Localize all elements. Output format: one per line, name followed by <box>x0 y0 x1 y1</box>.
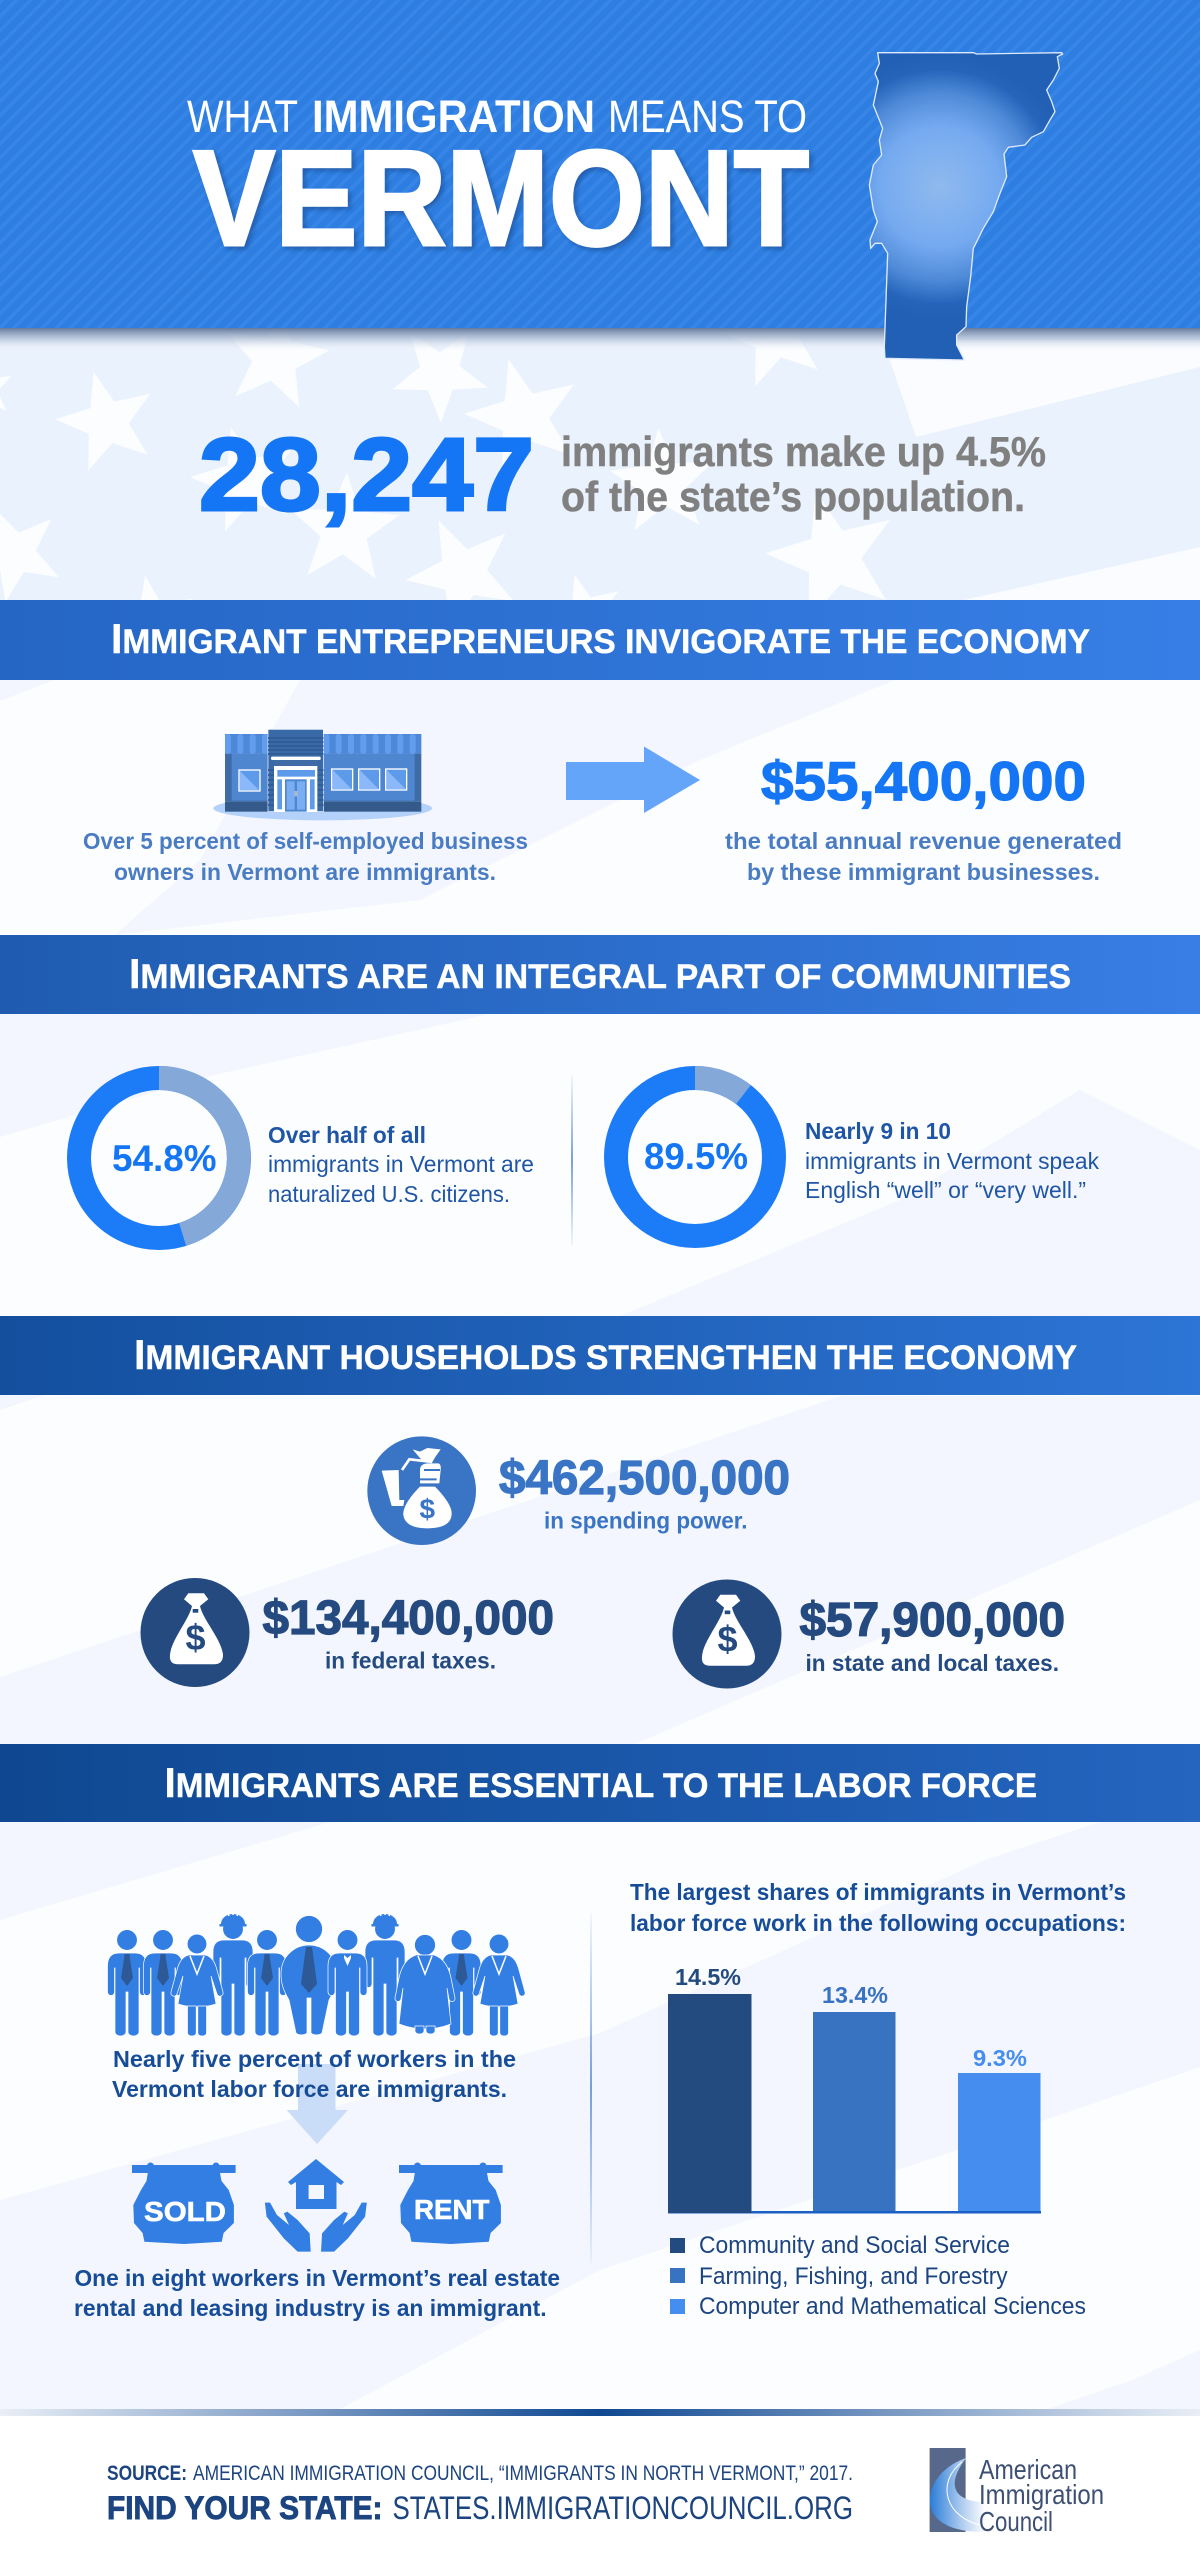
bar chart: occupations: 13.4% <box>822 1982 888 2008</box>
footer: source <box>107 2462 853 2526</box>
legend <box>670 2232 1086 2320</box>
text: occupations heading <box>630 1879 1126 1936</box>
banner: households <box>0 1316 1200 1395</box>
text: naturalized citizens <box>268 1122 534 1207</box>
statistic: spending power: $462,500,000 <box>499 1452 790 1505</box>
icon: rent sign <box>399 2162 503 2244</box>
statistic: spending power <box>499 1452 790 1534</box>
icon: money bag, federal taxes <box>140 1578 250 1687</box>
bar chart: occupations: 9.3% <box>973 2045 1027 2071</box>
icon: money bag, state and local taxes <box>672 1580 782 1688</box>
title: VERMONT <box>193 122 809 274</box>
text: self-employed owners <box>83 828 528 885</box>
panel: households <box>140 1436 1065 1688</box>
logo: American Immigration Council: American <box>979 2454 1077 2485</box>
header band <box>0 0 1200 352</box>
donut chart: naturalized citizens <box>79 1078 239 1238</box>
footer: source: SOURCE: <box>107 2462 187 2485</box>
map: Vermont <box>869 53 1063 360</box>
donut chart: naturalized citizens: 54.8% <box>112 1138 216 1179</box>
banner: labor force: IMMIGRANTS ARE ESSENTIAL TO THE LABOR FORCE <box>164 1759 1037 1806</box>
statistic: federal taxes <box>262 1592 554 1674</box>
statistic: total immigrants: immigrants make up 4.5% <box>561 428 1046 475</box>
footer: source: STATES.IMMIGRATIONCOUNCIL.ORG <box>392 2490 853 2526</box>
text: self-employed owners: owners in Vermont are immigrants. <box>114 859 496 885</box>
icon: money bag, federal taxes: $ <box>185 1617 206 1658</box>
text: naturalized citizens: Over half of all <box>268 1122 426 1148</box>
legend: Computer and Mathematical Sciences <box>699 2293 1086 2320</box>
logo: American Immigration Council <box>930 2448 1104 2537</box>
text: English proficiency <box>805 1118 1099 1203</box>
panel: communities <box>79 1075 1099 1246</box>
icon: sold sign <box>132 2162 236 2244</box>
text: workers in labor force: Nearly five percent of workers in the <box>113 2046 516 2072</box>
icon: group of workers <box>108 1912 525 2036</box>
text: self-employed owners: Over 5 percent of self-employed business <box>83 828 528 854</box>
bar chart: occupations: 14.5% <box>675 1964 741 1990</box>
statistic: total immigrants: of the state’s population. <box>561 473 1025 520</box>
text: English proficiency: immigrants in Vermont speak <box>805 1148 1099 1174</box>
icon: hand holding money bag <box>367 1436 476 1545</box>
arrow: right <box>566 746 700 813</box>
statistic: state and local taxes <box>800 1594 1065 1676</box>
text: workers in labor force <box>112 2046 516 2102</box>
title: IMMIGRATION <box>312 91 595 142</box>
text: real estate workers: rental and leasing industry is an immigrant. <box>74 2295 547 2321</box>
banner: communities <box>0 935 1200 1014</box>
icon: rent sign: RENT <box>414 2194 489 2225</box>
logo: American Immigration Council: Council <box>979 2506 1053 2537</box>
icon: money bag, state and local taxes: $ <box>717 1618 738 1660</box>
icon: sold sign: SOLD <box>144 2196 226 2227</box>
text: workers in labor force: Vermont labor force are immigrants. <box>112 2076 507 2102</box>
icon: storefront <box>213 729 432 820</box>
arrow: down <box>287 2064 348 2144</box>
icon: hand holding money bag: $ <box>420 1493 436 1524</box>
statistic: state and local taxes: $57,900,000 <box>800 1594 1065 1647</box>
text: English proficiency: Nearly 9 in 10 <box>805 1118 951 1144</box>
donut chart: English proficiency <box>616 1078 774 1236</box>
footer divider <box>0 2409 1200 2416</box>
legend: Community and Social Service <box>699 2232 1010 2259</box>
statistic: annual revenue: the total annual revenue generated <box>725 828 1122 854</box>
title: WHAT <box>187 91 298 142</box>
text: occupations heading: labor force work in the following occupations: <box>630 1910 1126 1936</box>
title: MEANS TO <box>608 91 807 142</box>
statistic: annual revenue: $55,400,000 <box>761 750 1086 812</box>
logo: American Immigration Council: Immigration <box>979 2479 1104 2510</box>
icon: house in hands <box>265 2159 367 2252</box>
legend: Farming, Fishing, and Forestry <box>699 2263 1008 2290</box>
statistic: federal taxes: in federal taxes. <box>325 1648 496 1674</box>
text: naturalized citizens: immigrants in Vermont are <box>268 1151 534 1177</box>
text: naturalized citizens: naturalized U.S. citizens. <box>268 1181 510 1207</box>
bar chart: occupations <box>668 1964 1041 2214</box>
text: occupations heading: The largest shares of immigrants in Vermont’s <box>630 1879 1126 1905</box>
statistic: spending power: in spending power. <box>544 1508 748 1534</box>
banner: communities: IMMIGRANTS ARE AN INTEGRAL PART OF COMMUNITIES <box>129 950 1071 997</box>
text: English proficiency: English “well” or “very well.” <box>805 1177 1086 1203</box>
text: real estate workers: One in eight workers in Vermont’s real estate <box>74 2265 560 2291</box>
statistic: state and local taxes: in state and local taxes. <box>806 1650 1059 1676</box>
text: real estate workers <box>74 2265 560 2321</box>
statistic: total immigrants <box>199 417 1046 532</box>
panel: entrepreneurs <box>83 729 1122 885</box>
footer: source: AMERICAN IMMIGRATION COUNCIL, “IMMIGRANTS IN NORTH VERMONT,” 2017. <box>193 2462 853 2485</box>
statistic: annual revenue <box>725 750 1122 885</box>
statistic: federal taxes: $134,400,000 <box>262 1592 554 1645</box>
statistic: annual revenue: by these immigrant businesses. <box>747 859 1100 885</box>
footer: source: FIND YOUR STATE: <box>107 2490 382 2526</box>
banner: entrepreneurs <box>0 600 1200 680</box>
banner: households: IMMIGRANT HOUSEHOLDS STRENGTHEN THE ECONOMY <box>134 1331 1077 1378</box>
panel: labor force <box>74 1879 1126 2321</box>
donut chart: English proficiency: 89.5% <box>644 1136 748 1177</box>
banner: labor force <box>0 1744 1200 1822</box>
banner: entrepreneurs: IMMIGRANT ENTREPRENEURS INVIGORATE THE ECONOMY <box>111 615 1090 662</box>
statistic: total immigrants: 28,247 <box>199 417 534 532</box>
